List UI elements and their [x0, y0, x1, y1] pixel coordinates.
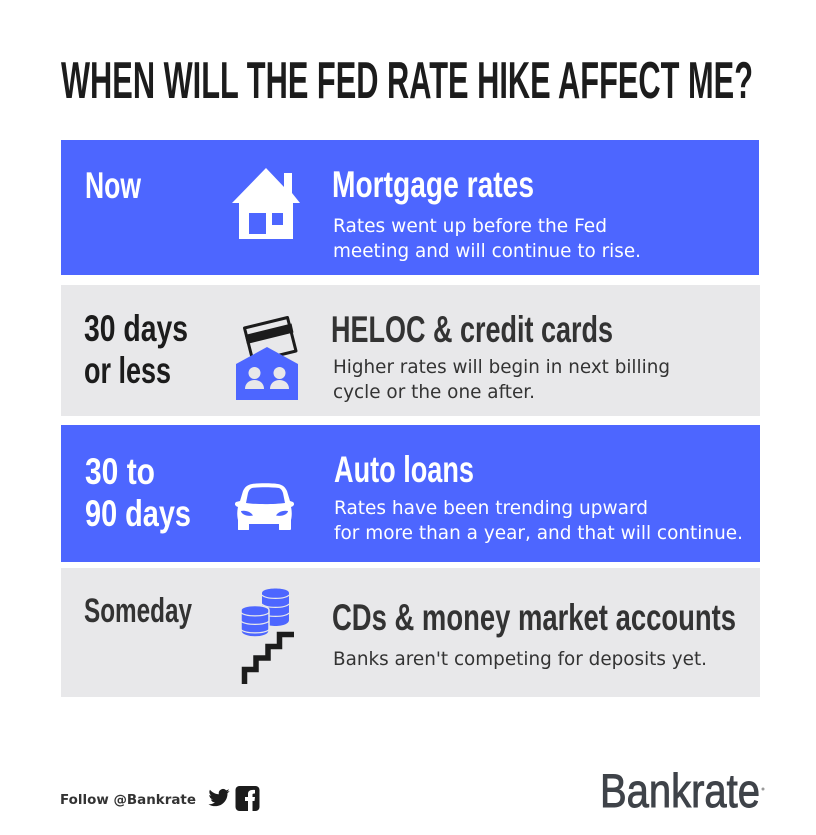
timing: 30 to 90 days: [85, 451, 191, 534]
text: mortgage description: Rates went up before the Fed: [333, 215, 607, 237]
text: HELOC description: [333, 356, 670, 403]
timing: 30 to 90 days: 90 days: [85, 493, 191, 534]
text: mortgage description: meeting and will continue to rise.: [333, 240, 641, 262]
text: mortgage description: [333, 215, 641, 262]
text: auto loans description: [334, 497, 743, 544]
icon: car: [235, 483, 294, 530]
icon: coins and stairs: [241, 588, 294, 684]
heading: HELOC and credit cards: HELOC & credit cards: [331, 309, 613, 350]
text: HELOC description: cycle or the one after.: [333, 381, 535, 403]
text: HELOC description: Higher rates will begin in next billing: [333, 356, 670, 378]
timing: 30 days or less: 30 days: [84, 308, 188, 349]
panel: auto loans: [61, 425, 760, 562]
heading: mortgage rates: Mortgage rates: [332, 164, 534, 205]
text: auto loans description: Rates have been trending upward: [334, 497, 648, 519]
timing: someday: Someday: [84, 592, 192, 630]
timing: 30 days or less: [84, 308, 188, 391]
text: auto loans description: for more than a year, and that will continue.: [334, 522, 743, 544]
icon: credit card and house: [236, 318, 298, 400]
panel: CDs and money market accounts: [61, 568, 760, 697]
heading: auto loans: Auto loans: [334, 449, 474, 490]
timing: now: Now: [85, 165, 141, 206]
icon: facebook: [236, 786, 260, 811]
icon: house: [232, 168, 300, 239]
footer: follow text: Follow @Bankrate: [60, 792, 196, 808]
logo: Bankrate: Bankrate: [600, 764, 760, 817]
timing: 30 to 90 days: 30 to: [85, 451, 155, 492]
text: CDs description: Banks aren't competing for deposits yet.: [333, 648, 707, 670]
icon: twitter: [208, 789, 230, 806]
panel: HELOC and credit cards: [61, 285, 760, 416]
panel: mortgage rates: [61, 140, 759, 275]
timing: 30 days or less: or less: [84, 350, 171, 391]
